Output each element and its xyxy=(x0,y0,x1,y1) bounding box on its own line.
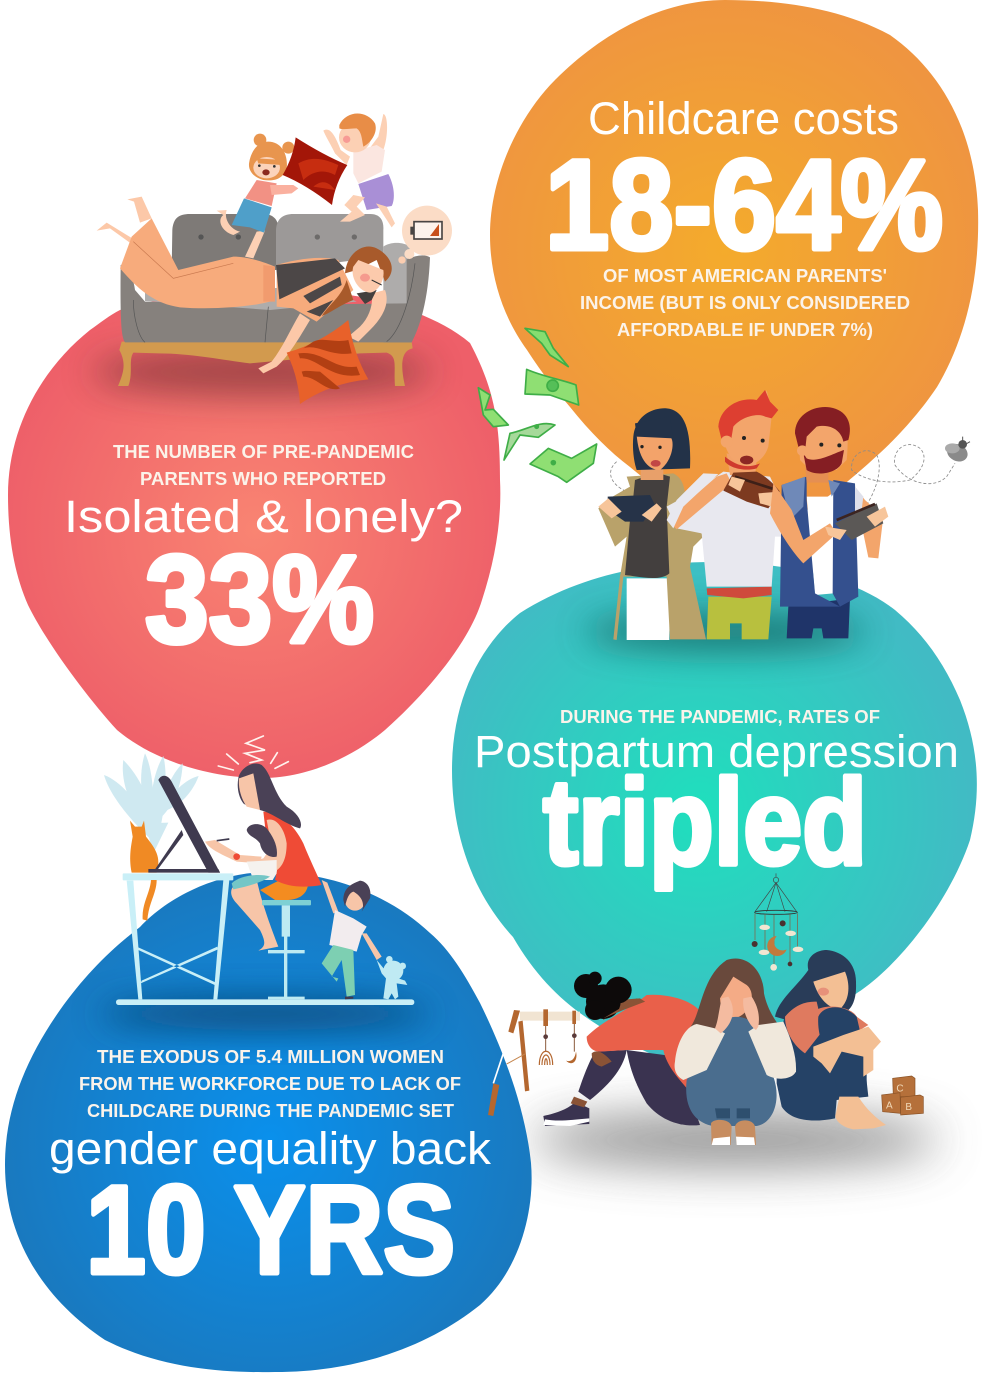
child with teddy bear xyxy=(322,880,382,999)
text block: gender equality back: gender equality back xyxy=(49,1123,492,1174)
illustration: three crying mothers with baby toys xyxy=(488,873,923,1145)
illustration: mother exhausted on sofa with children xyxy=(97,114,452,404)
alphabet blocks: B xyxy=(905,1102,912,1113)
man in white shirt with brown wallet xyxy=(667,390,798,639)
illustration: mother at drawing desk with children xyxy=(104,736,414,1005)
text block: isolated and lonely: THE NUMBER OF PRE-PANDEMIC xyxy=(113,441,414,462)
stress marks xyxy=(218,736,288,770)
panel: blue gender equality blob xyxy=(5,872,532,1372)
text block: isolated and lonely: Isolated & lonely? xyxy=(64,491,463,542)
teddy bear xyxy=(377,956,407,999)
text block: postpartum depression: tripled xyxy=(543,754,867,890)
mother lying down xyxy=(97,197,392,373)
text block: postpartum depression: DURING THE PANDEMIC, RATES OF xyxy=(560,706,880,727)
sofa shadow on red blob xyxy=(92,348,432,396)
text block: childcare costs: AFFORDABLE IF UNDER 7%) xyxy=(617,319,873,340)
desk shadow on blue blob xyxy=(100,997,430,1031)
desk xyxy=(116,873,414,1005)
woman in red leaning over knees xyxy=(543,972,702,1126)
text block: isolated and lonely: PARENTS WHO REPORTED xyxy=(140,468,386,489)
crying woman center xyxy=(675,959,796,1145)
panel: teal postpartum depression blob xyxy=(452,562,977,1072)
boy jumping xyxy=(323,114,395,227)
baby mobile xyxy=(752,873,803,971)
curly hair xyxy=(574,972,632,1020)
sofa xyxy=(118,214,430,386)
alphabet blocks: C xyxy=(896,1084,904,1095)
woman with knees up, dark hair xyxy=(775,950,886,1129)
panel: orange childcare costs blob xyxy=(490,0,978,530)
text block: childcare costs xyxy=(545,93,943,340)
text block: isolated and lonely xyxy=(64,441,463,669)
girl with pillow xyxy=(217,134,347,258)
woman with dark wallet xyxy=(598,408,706,640)
text block: gender equality back xyxy=(49,1046,492,1300)
plant leaves xyxy=(104,753,199,853)
text block: childcare costs: INCOME (BUT IS ONLY CONSIDERED xyxy=(580,292,910,313)
text block: childcare costs: 18-64% xyxy=(545,134,943,277)
text block: gender equality back: THE EXODUS OF 5.4 MILLION WOMEN xyxy=(97,1046,444,1067)
bearded man in blue vest with grey wallet xyxy=(770,407,888,638)
striped pillow on floor xyxy=(287,320,368,404)
thought bubble: low battery xyxy=(398,206,452,264)
dashed fly trails xyxy=(611,445,955,505)
baby play gym xyxy=(488,1009,580,1116)
text block: isolated and lonely: 33% xyxy=(145,531,374,669)
text block: childcare costs: OF MOST AMERICAN PARENTS' xyxy=(603,265,887,286)
illustration: three worried adults with empty wallets and money xyxy=(478,328,971,640)
alphabet blocks: A xyxy=(886,1101,893,1112)
floor shadow under crying women xyxy=(530,1114,940,1166)
flying money xyxy=(478,328,597,482)
text block: postpartum depression: Postpartum depression xyxy=(474,726,959,777)
bee xyxy=(944,437,971,465)
text block: gender equality back: CHILDCARE DURING THE PANDEMIC SET xyxy=(87,1100,455,1121)
mother and baby xyxy=(205,764,322,999)
cat xyxy=(130,821,158,921)
text block: gender equality back: FROM THE WORKFORCE DUE TO LACK OF xyxy=(79,1073,461,1094)
panel: red isolated and lonely blob xyxy=(8,292,500,778)
alphabet blocks xyxy=(882,1076,923,1115)
people shadow on teal blob xyxy=(585,612,865,652)
text block: childcare costs: Childcare costs xyxy=(588,93,899,144)
drawing tablet xyxy=(148,776,220,873)
text block: postpartum depression xyxy=(474,706,959,890)
text block: gender equality back: 10 YRS xyxy=(86,1161,455,1300)
